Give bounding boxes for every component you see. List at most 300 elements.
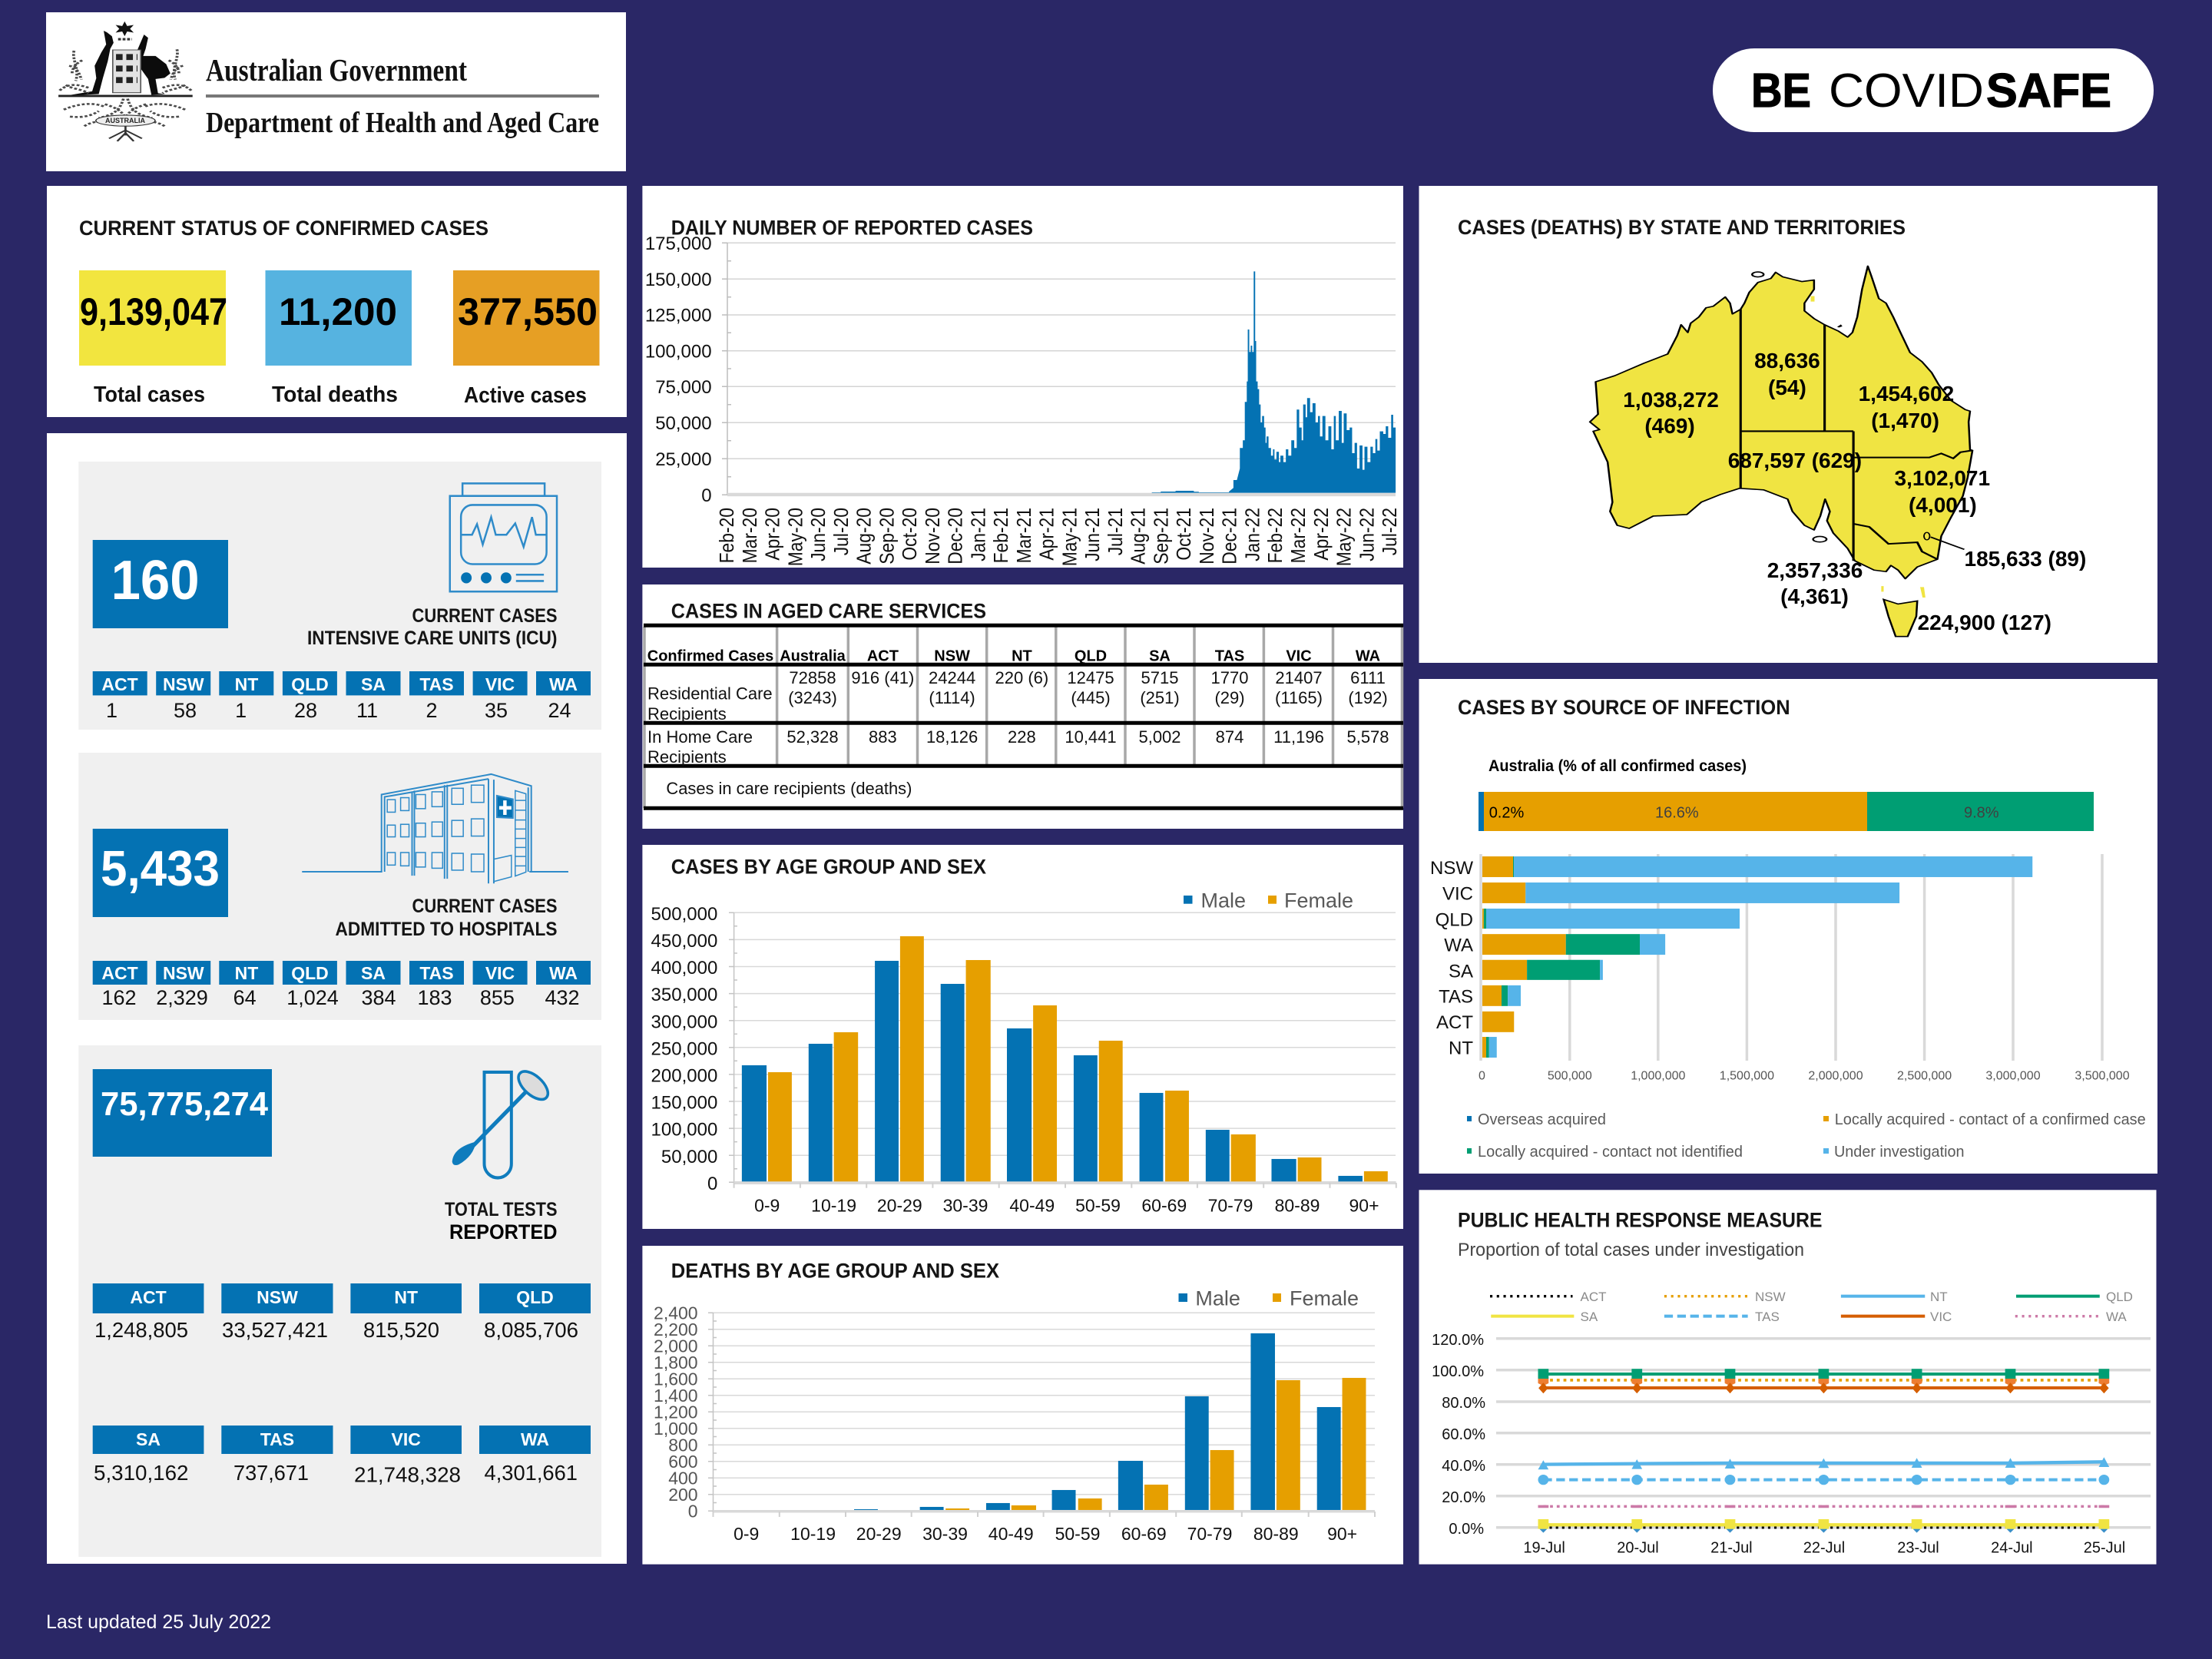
legend: source of infection bbox=[1467, 1111, 2146, 1161]
label: tests caption: TOTAL TESTS bbox=[445, 1199, 558, 1220]
axis: percent labels: 40.0% bbox=[1442, 1458, 1485, 1475]
axis: cases y labels: 500,000 bbox=[651, 904, 717, 925]
axis: deaths y labels: 1,000 bbox=[654, 1419, 698, 1439]
table row: residential care recipients: 916 (41) bbox=[851, 668, 914, 687]
map labels: cases and deaths by state: (1,470) bbox=[1871, 409, 1939, 432]
axis: deaths age labels: 30-39 bbox=[922, 1524, 968, 1544]
stat: total deaths: Total deaths bbox=[272, 382, 398, 407]
axis: daily y labels: 150,000 bbox=[645, 270, 712, 290]
table header row: NT bbox=[1012, 648, 1032, 665]
stat: ICU total: 160 bbox=[111, 550, 200, 611]
table row: in home care recipients: 5,578 bbox=[1346, 727, 1389, 747]
state row: ICU by state: QLD bbox=[291, 674, 329, 694]
axis: state labels: NT bbox=[1449, 1038, 1473, 1059]
legend: response measure states: TAS bbox=[1755, 1310, 1780, 1324]
state row: hospital by state: SA bbox=[361, 963, 386, 983]
state row: hospital by state: WA bbox=[549, 963, 578, 983]
map labels: cases and deaths by state: 88,636 bbox=[1754, 349, 1820, 373]
axis: cases y labels: 200,000 bbox=[651, 1066, 717, 1086]
axis: cases age labels: 0-9 bbox=[754, 1195, 780, 1215]
axis: daily month labels: Oct-21 bbox=[1174, 508, 1196, 561]
heading: source of infection: CASES BY SOURCE OF INFECTION bbox=[1458, 696, 1790, 719]
panel: cases (deaths) by state and territories bbox=[1419, 186, 2157, 663]
axis: percent labels: 20.0% bbox=[1442, 1489, 1485, 1506]
panel: total tests reported bbox=[78, 1045, 601, 1557]
table row: residential care recipients: (3243) bbox=[788, 688, 837, 707]
axis: state labels: WA bbox=[1444, 935, 1473, 955]
axis: deaths age labels: 40-49 bbox=[988, 1524, 1034, 1544]
map labels: cases and deaths by state: 224,900 (127) bbox=[1918, 611, 2051, 634]
axis: cases age labels bbox=[754, 1195, 1379, 1215]
label: tests caption bbox=[445, 1199, 558, 1243]
table header row: VIC bbox=[1286, 648, 1312, 665]
axis: daily month labels: Jan-21 bbox=[968, 508, 990, 561]
label: ICU caption: INTENSIVE CARE UNITS (ICU) bbox=[307, 628, 558, 649]
state row: hospital by state: QLD bbox=[291, 963, 329, 983]
axis: daily month labels: Dec-20 bbox=[945, 508, 967, 565]
label: hospital caption: CURRENT CASES bbox=[412, 896, 558, 917]
table row: residential care recipients: 21407 bbox=[1275, 668, 1323, 687]
table row: residential care recipients: (192) bbox=[1348, 688, 1388, 707]
table row: residential care recipients: (1114) bbox=[929, 688, 975, 707]
table row: in home care recipients: 5,002 bbox=[1138, 727, 1181, 747]
state row: ICU by state: NSW bbox=[163, 674, 204, 694]
axis: daily month labels: Sep-21 bbox=[1151, 508, 1173, 565]
axis: date labels: 23-Jul bbox=[1897, 1539, 1939, 1556]
axis: deaths age labels: 0-9 bbox=[733, 1524, 759, 1544]
legend: response measure states: ACT bbox=[1581, 1290, 1607, 1304]
axis: daily y labels bbox=[645, 233, 712, 506]
state grid: tests by state: 8,085,706 bbox=[484, 1318, 578, 1342]
logo text: Australian Government: Australian Government bbox=[206, 52, 467, 88]
state row: ICU by state: 2 bbox=[426, 699, 438, 722]
table row: residential care recipients: (251) bbox=[1140, 688, 1180, 707]
table header row: Australia bbox=[780, 648, 846, 665]
table header row: NSW bbox=[934, 648, 970, 665]
table row: residential care recipients bbox=[647, 668, 1388, 724]
table row: residential care recipients: Recipients bbox=[647, 704, 727, 724]
map labels: cases and deaths by state: (4,001) bbox=[1909, 493, 1977, 517]
table row: residential care recipients: (29) bbox=[1214, 688, 1245, 707]
axis: daily month labels: Jul-21 bbox=[1105, 508, 1127, 555]
axis: daily month labels: Mar-20 bbox=[740, 508, 761, 563]
axis: deaths y labels: 200 bbox=[668, 1485, 698, 1505]
axis: daily month labels: Feb-22 bbox=[1265, 508, 1287, 563]
axis: cases y labels: 50,000 bbox=[661, 1147, 717, 1167]
axis: daily month labels: Jun-21 bbox=[1082, 508, 1104, 561]
state grid: tests by state: 815,520 bbox=[363, 1318, 439, 1342]
axis: case count labels: 500,000 bbox=[1548, 1069, 1592, 1083]
table row: in home care recipients: 10,441 bbox=[1065, 727, 1117, 747]
axis: case count labels: 2,000,000 bbox=[1808, 1069, 1863, 1083]
icon: coat of arms crest bbox=[58, 22, 193, 141]
state row: ICU by state: WA bbox=[549, 674, 578, 694]
logo text: Department of Health and Aged Care: Department of Health and Aged Care bbox=[206, 107, 599, 139]
axis: daily y labels: 100,000 bbox=[645, 341, 712, 362]
label: ICU caption: CURRENT CASES bbox=[412, 605, 558, 627]
axis: daily y labels: 25,000 bbox=[655, 449, 712, 470]
panel: deaths by age group and sex bbox=[642, 1246, 1403, 1565]
axis: deaths y labels: 2,400 bbox=[654, 1303, 698, 1323]
table row: residential care recipients: (1165) bbox=[1275, 688, 1323, 707]
map labels: cases and deaths by state: (4,361) bbox=[1780, 584, 1849, 608]
axis: daily month labels: May-22 bbox=[1333, 508, 1356, 566]
stacked bar: Australia share: 0.2% bbox=[1489, 805, 1525, 822]
axis: cases y labels bbox=[651, 904, 717, 1194]
axis: cases age labels: 90+ bbox=[1349, 1195, 1379, 1215]
axis: daily month labels: Dec-21 bbox=[1219, 508, 1241, 565]
axis: cases y labels: 400,000 bbox=[651, 958, 717, 979]
table note: Cases in care recipients (deaths) bbox=[666, 779, 912, 798]
state row: hospital by state: ACT bbox=[101, 963, 138, 983]
axis: case count labels: 3,000,000 bbox=[1985, 1069, 2041, 1083]
axis: percent labels: 100.0% bbox=[1432, 1363, 1484, 1380]
axis: cases age labels: 80-89 bbox=[1275, 1195, 1320, 1215]
axis: deaths age labels: 90+ bbox=[1327, 1524, 1357, 1544]
badge: BE COVIDSAFE: BE bbox=[1751, 65, 1811, 118]
table header row: WA bbox=[1356, 648, 1380, 665]
legend: response measure states: NT bbox=[1930, 1290, 1948, 1304]
panel: cases in aged care services bbox=[642, 584, 1403, 829]
state row: hospital by state: TAS bbox=[419, 963, 454, 983]
stacked bar: Australia share: 16.6% bbox=[1655, 805, 1699, 822]
axis: daily month labels: Sep-20 bbox=[876, 508, 899, 565]
state row: ICU by state: 11 bbox=[356, 699, 378, 722]
axis: daily month labels: Jun-20 bbox=[808, 508, 830, 561]
axis: daily month labels: Jun-22 bbox=[1356, 508, 1379, 561]
label: hospital caption bbox=[335, 896, 558, 940]
axis: state labels: VIC bbox=[1442, 883, 1473, 904]
axis: cases age labels: 40-49 bbox=[1009, 1195, 1055, 1215]
axis: daily month labels: Aug-20 bbox=[853, 508, 876, 565]
legend: deaths male female: Female bbox=[1290, 1287, 1359, 1310]
table row: in home care recipients: 883 bbox=[869, 727, 897, 747]
badge: BE COVIDSAFE: SAFE bbox=[1986, 65, 2111, 118]
map labels: cases and deaths by state: 687,597 (629) bbox=[1728, 449, 1862, 472]
crest ribbon text: AUSTRALIA bbox=[105, 117, 145, 124]
heading: aged care: CASES IN AGED CARE SERVICES bbox=[671, 599, 986, 622]
state row: hospital by state: VIC bbox=[485, 963, 515, 983]
legend: response measure states: SA bbox=[1581, 1310, 1598, 1324]
state row: hospital by state: 183 bbox=[417, 986, 452, 1009]
table header row: SA bbox=[1149, 648, 1171, 665]
state row: hospital by state: NSW bbox=[163, 963, 204, 983]
axis: daily month labels: Jul-22 bbox=[1379, 508, 1401, 555]
state row: ICU by state: 1 bbox=[106, 699, 118, 722]
axis: daily y labels: 125,000 bbox=[645, 306, 712, 326]
legend: source of infection: Locally acquired - contact not identified bbox=[1478, 1144, 1743, 1161]
axis: daily y labels: 50,000 bbox=[655, 413, 712, 434]
panel: cases by source of infection bbox=[1419, 679, 2157, 1174]
axis: percent labels bbox=[1432, 1332, 1485, 1538]
map: Australia states bbox=[1590, 266, 1972, 637]
state row: ICU by state: ACT bbox=[101, 674, 138, 694]
state grid: tests by state: ACT bbox=[130, 1287, 167, 1307]
panel: public health response measure bbox=[1419, 1190, 2157, 1565]
chart: cases by age bars bbox=[651, 904, 1396, 1215]
table row: residential care recipients: Residential Care bbox=[647, 684, 773, 704]
table row: residential care recipients: 1770 bbox=[1211, 668, 1248, 687]
stat: active cases bbox=[453, 270, 599, 408]
axis: cases y labels: 350,000 bbox=[651, 985, 717, 1005]
axis: deaths age labels: 60-69 bbox=[1121, 1524, 1167, 1544]
axis: daily month labels: Nov-21 bbox=[1197, 508, 1218, 565]
map labels: cases and deaths by state: 2,357,336 bbox=[1767, 558, 1863, 582]
axis: deaths y labels: 1,600 bbox=[654, 1369, 698, 1389]
axis: case count labels: 1,000,000 bbox=[1631, 1069, 1685, 1083]
panel: daily number of reported cases bbox=[642, 186, 1403, 568]
table header row: QLD bbox=[1075, 648, 1107, 665]
axis: state labels: SA bbox=[1449, 961, 1473, 982]
stat: total tests: 75,775,274 bbox=[101, 1085, 269, 1123]
legend: response measure states: NSW bbox=[1755, 1290, 1786, 1304]
table row: in home care recipients bbox=[647, 727, 1389, 767]
axis: date labels bbox=[1523, 1539, 2125, 1556]
axis: date labels: 19-Jul bbox=[1523, 1539, 1565, 1556]
axis: daily month labels: Apr-20 bbox=[762, 508, 784, 561]
panel: current cases in ICU bbox=[78, 462, 601, 730]
table row: in home care recipients: 874 bbox=[1216, 727, 1243, 747]
state grid: tests by state: 21,748,328 bbox=[354, 1462, 461, 1487]
axis: daily month labels: Oct-20 bbox=[899, 508, 921, 561]
table row: residential care recipients: 72858 bbox=[789, 668, 836, 687]
label: tests caption: REPORTED bbox=[449, 1220, 558, 1243]
state row: ICU by state: 58 bbox=[174, 699, 197, 722]
panel: current status of confirmed cases bbox=[47, 186, 627, 417]
state grid: tests by state: NT bbox=[394, 1287, 418, 1307]
axis: percent labels: 120.0% bbox=[1432, 1332, 1484, 1349]
state row: ICU by state: SA bbox=[361, 674, 386, 694]
table row: in home care recipients: 18,126 bbox=[926, 727, 978, 747]
chart: daily cases bars bbox=[645, 233, 1401, 566]
axis: daily month labels: Nov-20 bbox=[922, 508, 944, 565]
state row: hospital by state: NT bbox=[235, 963, 258, 983]
label: ICU caption bbox=[307, 605, 558, 649]
axis: state labels: NSW bbox=[1430, 858, 1473, 879]
badge: BE COVIDSAFE bbox=[1713, 48, 2154, 132]
chart: deaths by age bars bbox=[654, 1303, 1375, 1544]
axis: cases age labels: 10-19 bbox=[811, 1195, 856, 1215]
heading: public health response: PUBLIC HEALTH RESPONSE MEASURE bbox=[1458, 1209, 1822, 1232]
axis: state labels: TAS bbox=[1439, 987, 1473, 1008]
axis: deaths y labels: 800 bbox=[668, 1435, 698, 1455]
state grid: tests by state: TAS bbox=[260, 1429, 294, 1449]
legend: deaths male female: Male bbox=[1195, 1287, 1240, 1310]
legend: response measure states bbox=[1490, 1290, 2133, 1324]
axis: deaths age labels: 80-89 bbox=[1253, 1524, 1299, 1544]
stat: total tests bbox=[93, 1069, 272, 1157]
state grid: tests by state: SA bbox=[136, 1429, 161, 1449]
state grid: tests by state bbox=[93, 1283, 591, 1487]
legend: cases male female: Male bbox=[1201, 889, 1246, 912]
state row: hospital by state bbox=[93, 961, 591, 1009]
state grid: tests by state: 1,248,805 bbox=[94, 1318, 188, 1342]
axis: date labels: 24-Jul bbox=[1991, 1539, 2033, 1556]
state grid: tests by state: VIC bbox=[392, 1429, 421, 1449]
map labels: cases and deaths by state: 1,038,272 bbox=[1623, 388, 1719, 412]
logo: Australian Government Department of Health and Aged Care bbox=[46, 12, 626, 171]
axis: daily month labels: Feb-21 bbox=[991, 508, 1012, 563]
stat: ICU total bbox=[93, 540, 228, 628]
icon: heart monitor bbox=[450, 483, 557, 591]
state grid: tests by state: QLD bbox=[516, 1287, 554, 1307]
axis: daily month labels bbox=[717, 508, 1401, 566]
legend: source of infection: Overseas acquired bbox=[1478, 1111, 1606, 1128]
axis: deaths age labels: 10-19 bbox=[790, 1524, 836, 1544]
icon: test tube and swab bbox=[452, 1066, 552, 1178]
map labels: cases and deaths by state: (54) bbox=[1768, 376, 1806, 399]
panel: current cases admitted to hospitals bbox=[78, 753, 601, 1020]
state grid: tests by state: WA bbox=[521, 1429, 549, 1449]
table row: residential care recipients: 5715 bbox=[1141, 668, 1178, 687]
legend: source of infection: Locally acquired - contact of a confirmed case bbox=[1835, 1111, 2146, 1128]
axis: deaths y labels: 400 bbox=[668, 1469, 698, 1488]
legend: response measure states: WA bbox=[2106, 1310, 2127, 1324]
axis: date labels: 20-Jul bbox=[1617, 1539, 1659, 1556]
heading: state map: CASES (DEATHS) BY STATE AND TERRITORIES bbox=[1458, 216, 1906, 239]
state row: hospital by state: 162 bbox=[101, 986, 137, 1009]
state grid: tests by state: 5,310,162 bbox=[94, 1461, 189, 1485]
axis: daily month labels: Aug-21 bbox=[1128, 508, 1150, 565]
axis: daily month labels: Feb-20 bbox=[717, 508, 738, 563]
axis: deaths age labels: 50-59 bbox=[1055, 1524, 1100, 1544]
legend: source of infection: Under investigation bbox=[1834, 1144, 1965, 1161]
stat: total deaths: 11,200 bbox=[279, 290, 397, 333]
axis: cases age labels: 60-69 bbox=[1141, 1195, 1187, 1215]
panel: ICU, hospital and tests bbox=[47, 433, 627, 1564]
axis: case count labels: 0 bbox=[1479, 1069, 1485, 1083]
axis: deaths y labels: 2,000 bbox=[654, 1336, 698, 1356]
table: aged care cases bbox=[644, 625, 1403, 808]
table row: residential care recipients: 24244 bbox=[929, 668, 975, 687]
axis: deaths y labels: 0 bbox=[688, 1502, 698, 1522]
axis: daily month labels: May-21 bbox=[1059, 508, 1081, 566]
table row: residential care recipients: 220 (6) bbox=[995, 668, 1048, 687]
axis: daily month labels: May-20 bbox=[785, 508, 807, 566]
axis: case count labels: 2,500,000 bbox=[1897, 1069, 1952, 1083]
axis: deaths y labels: 2,200 bbox=[654, 1320, 698, 1339]
axis: daily month labels: Jan-22 bbox=[1242, 508, 1264, 561]
state row: hospital by state: 855 bbox=[480, 986, 515, 1009]
axis: cases y labels: 300,000 bbox=[651, 1012, 717, 1032]
axis: deaths age labels: 20-29 bbox=[856, 1524, 902, 1544]
axis: daily month labels: Mar-22 bbox=[1288, 508, 1310, 563]
axis: date labels: 22-Jul bbox=[1803, 1539, 1845, 1556]
axis: cases y labels: 0 bbox=[707, 1174, 717, 1194]
state row: hospital by state: 1,024 bbox=[286, 986, 339, 1009]
axis: state labels: QLD bbox=[1435, 909, 1473, 930]
chart: response measure lines bbox=[1432, 1332, 2151, 1556]
state grid: tests by state: NSW bbox=[257, 1287, 298, 1307]
state row: ICU by state: NT bbox=[235, 674, 258, 694]
map labels: cases and deaths by state: 185,633 (89) bbox=[1965, 547, 2086, 571]
badge: BE COVIDSAFE: COVID bbox=[1829, 65, 1984, 118]
table row: residential care recipients: 12475 bbox=[1067, 668, 1114, 687]
table row: in home care recipients: In Home Care bbox=[647, 727, 753, 747]
state row: ICU by state: 24 bbox=[548, 699, 571, 722]
stat: total cases bbox=[79, 270, 227, 407]
table row: residential care recipients: (445) bbox=[1071, 688, 1111, 707]
state grid: tests by state: 33,527,421 bbox=[222, 1318, 328, 1342]
map labels: cases and deaths by state: 3,102,071 bbox=[1895, 466, 1990, 490]
axis: deaths y labels: 1,400 bbox=[654, 1386, 698, 1406]
axis: date labels: 21-Jul bbox=[1710, 1539, 1753, 1556]
panel: cases by age group and sex bbox=[642, 845, 1403, 1229]
axis: case count labels: 1,500,000 bbox=[1720, 1069, 1774, 1083]
map labels: cases and deaths by state bbox=[1623, 349, 2086, 634]
axis: cases age labels: 30-39 bbox=[943, 1195, 988, 1215]
map labels: cases and deaths by state: (469) bbox=[1644, 414, 1695, 438]
axis: date labels: 25-Jul bbox=[2084, 1539, 2125, 1556]
state grid: tests by state: 737,671 bbox=[233, 1461, 309, 1485]
label: hospital caption: ADMITTED TO HOSPITALS bbox=[335, 919, 558, 940]
stat: active cases: Active cases bbox=[464, 383, 587, 408]
table header row bbox=[647, 648, 1380, 665]
axis: case count labels bbox=[1479, 1069, 2130, 1083]
state row: hospital by state: 384 bbox=[361, 986, 396, 1009]
legend: cases male female bbox=[1184, 889, 1353, 912]
table row: residential care recipients: 6111 bbox=[1350, 668, 1386, 687]
axis: daily y labels: 0 bbox=[701, 485, 712, 506]
stacked bar: Australia share: 9.8% bbox=[1964, 805, 1999, 822]
axis: daily month labels: Apr-21 bbox=[1036, 508, 1058, 561]
legend: response measure states: QLD bbox=[2106, 1290, 2133, 1304]
axis: daily y labels: 75,000 bbox=[655, 377, 712, 398]
state row: hospital by state: 432 bbox=[545, 986, 580, 1009]
table row: in home care recipients: 11,196 bbox=[1273, 727, 1324, 747]
axis: deaths y labels bbox=[654, 1303, 698, 1522]
table header row: ACT bbox=[867, 648, 899, 665]
state row: hospital by state: 64 bbox=[233, 986, 257, 1009]
table row: in home care recipients: 52,328 bbox=[786, 727, 839, 747]
axis: case count labels: 3,500,000 bbox=[2075, 1069, 2130, 1083]
axis: daily y labels: 175,000 bbox=[645, 233, 712, 254]
legend: deaths male female bbox=[1178, 1287, 1359, 1310]
table header row: TAS bbox=[1215, 648, 1244, 665]
axis: cases age labels: 50-59 bbox=[1075, 1195, 1121, 1215]
table header row: Confirmed Cases bbox=[647, 648, 773, 665]
axis: deaths y labels: 1,200 bbox=[654, 1402, 698, 1422]
state grid: tests by state: 4,301,661 bbox=[484, 1461, 578, 1485]
axis: daily month labels: Apr-22 bbox=[1311, 508, 1333, 561]
heading: current status: CURRENT STATUS OF CONFIRMED CASES bbox=[79, 217, 488, 240]
heading: cases by age: CASES BY AGE GROUP AND SEX bbox=[671, 856, 986, 879]
heading: deaths by age: DEATHS BY AGE GROUP AND SEX bbox=[671, 1260, 999, 1283]
axis: deaths age labels: 70-79 bbox=[1187, 1524, 1232, 1544]
stat: total cases: 9,139,047 bbox=[80, 290, 227, 333]
axis: cases y labels: 150,000 bbox=[651, 1093, 717, 1114]
axis: daily month labels: Jul-20 bbox=[831, 508, 853, 555]
stat: total deaths bbox=[266, 270, 412, 407]
state row: hospital by state: 2,329 bbox=[156, 986, 208, 1009]
state row: ICU by state: TAS bbox=[419, 674, 454, 694]
heading: daily cases: DAILY NUMBER OF REPORTED CASES bbox=[671, 217, 1033, 240]
legend: response measure states: VIC bbox=[1930, 1310, 1952, 1324]
footer: last updated: Last updated 25 July 2022 bbox=[46, 1611, 271, 1633]
axis: cases age labels: 70-79 bbox=[1208, 1195, 1253, 1215]
legend: cases male female: Female bbox=[1284, 889, 1353, 912]
state row: ICU by state: 1 bbox=[235, 699, 247, 722]
state row: ICU by state: 35 bbox=[485, 699, 508, 722]
stat: active cases: 377,550 bbox=[458, 290, 598, 333]
axis: deaths y labels: 600 bbox=[668, 1452, 698, 1472]
state row: ICU by state bbox=[93, 671, 591, 722]
axis: daily month labels: Mar-21 bbox=[1014, 508, 1035, 563]
axis: cases age labels: 20-29 bbox=[877, 1195, 922, 1215]
axis: percent labels: 60.0% bbox=[1442, 1426, 1485, 1443]
state row: ICU by state: VIC bbox=[485, 674, 515, 694]
axis: cases y labels: 450,000 bbox=[651, 931, 717, 952]
